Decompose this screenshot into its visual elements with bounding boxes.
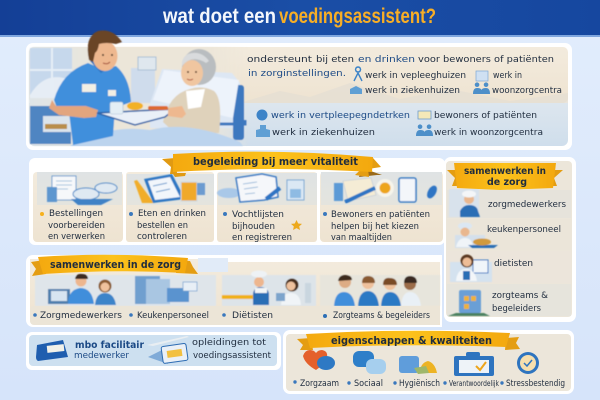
banner: samenwerken in de zorg: de zorg xyxy=(487,177,527,188)
work settings, lower list: bewoners of patiënten xyxy=(434,111,537,121)
card: eten en drinken: Eten en drinken xyxy=(138,209,206,219)
panel: hero introduction xyxy=(26,30,572,150)
row: keukenpersoneel xyxy=(447,219,571,250)
text: mbo facilitair medewerker: medewerker xyxy=(74,351,129,361)
hero illustration: care assistant serving a meal to a resident xyxy=(29,30,250,146)
labels: Zorgzaam xyxy=(300,379,339,389)
card: vochtlijsten: en registreren xyxy=(232,233,292,243)
icon: diploma cap xyxy=(147,336,189,364)
meal tray xyxy=(97,109,175,125)
work settings, upper list: werk in vepleeghuizen xyxy=(365,71,466,81)
icon: card xyxy=(418,111,431,119)
header bar with title xyxy=(0,0,600,37)
icon: person xyxy=(354,67,362,81)
work settings, lower list xyxy=(256,110,543,138)
card: eten en drinken: controleren xyxy=(137,232,187,242)
caption strip: Keukenpersoneel xyxy=(137,311,209,321)
card: maaltijden kiezen xyxy=(320,172,443,243)
work settings, upper list xyxy=(350,67,562,96)
card: bestellingen xyxy=(33,172,123,242)
row: dietisten xyxy=(447,251,571,283)
caption strip: Zorgteams & begeleiders xyxy=(333,311,430,321)
card: vochtlijsten: Vochtlijsten xyxy=(232,210,284,220)
text: mbo facilitair medewerker: mbo facilitair xyxy=(75,340,144,351)
illustration: zorgmedewerkers and keukenpersoneel xyxy=(35,274,216,306)
caption strip xyxy=(30,306,440,325)
card: eten en drinken xyxy=(126,172,214,242)
card: vochtlijsten xyxy=(217,172,317,243)
icon: hospital xyxy=(350,86,362,94)
banner: begeleiding bij meer vitaliteit: begeleiding bij meer vitaliteit xyxy=(193,155,358,168)
card: maaltijden kiezen: helpen bij het kiezen xyxy=(331,222,419,232)
work settings, lower list: werk in woonzorgcentra xyxy=(434,128,543,138)
panel: eigenschappen en kwaliteiten xyxy=(283,330,574,394)
title: voedingsassistent? xyxy=(279,5,436,28)
patient head xyxy=(182,49,216,85)
banner: samenwerken in de zorg xyxy=(447,163,563,190)
row: zorgmedewerkers: zorgmedewerkers xyxy=(488,200,566,210)
banner: begeleiding bij meer vitaliteit xyxy=(162,152,382,177)
intro text xyxy=(247,55,554,79)
card: bestellingen: Bestellingen xyxy=(49,209,103,219)
labels: Sociaal xyxy=(354,379,383,389)
banner: samenwerken in de zorg: samenwerken in xyxy=(464,166,546,177)
card: bestellingen: voorbereiden xyxy=(48,221,105,231)
care assistant body xyxy=(54,63,131,145)
intro text: ondersteunt xyxy=(247,55,313,65)
banner: samenwerken in de zorg xyxy=(31,255,198,276)
text: opleidingen tot voedingsassistent xyxy=(192,338,271,361)
panel: begeleiding bij meer vitaliteit xyxy=(29,152,445,245)
card: bestellingen: en verwerken xyxy=(48,232,105,242)
text: mbo facilitair medewerker xyxy=(74,340,144,361)
icon: hospital building xyxy=(256,125,270,137)
work settings, lower list: werk in ziekenhuizen xyxy=(272,128,375,138)
labels: Hygiënisch xyxy=(399,379,440,389)
pillow xyxy=(153,70,239,118)
icon: heart xyxy=(303,350,335,370)
intro text: in zorginstellingen. xyxy=(248,69,346,79)
banner: eigenschappen en kwaliteiten xyxy=(297,331,520,350)
patient body xyxy=(163,87,220,135)
row: keukenpersoneel: keukenpersoneel xyxy=(487,225,561,235)
icon: hygiene supplies xyxy=(399,356,437,374)
text: opleidingen tot voedingsassistent: opleidingen tot xyxy=(192,338,267,348)
card: vochtlijsten: bijhouden xyxy=(232,222,275,232)
side cart xyxy=(30,106,71,144)
title: wat doet een xyxy=(162,5,276,28)
intro text: en drinken xyxy=(358,55,415,65)
icon: two people xyxy=(416,124,433,136)
labels xyxy=(293,379,565,389)
care assistant head and hair xyxy=(92,41,118,71)
illustration: zorgteams xyxy=(320,275,440,306)
caption strip: Zorgmedewerkers xyxy=(40,311,122,321)
card: eten en drinken: bestellen en xyxy=(137,221,188,231)
icon: blue book xyxy=(36,340,68,361)
panel: samenwerken in de zorg (wide) xyxy=(26,255,442,327)
text: opleidingen tot voedingsassistent: voedingsassistent xyxy=(193,351,271,361)
row: dietisten: dietisten xyxy=(494,259,533,269)
icon: star xyxy=(291,220,302,230)
intro text: voor bewoners of patiënten xyxy=(418,55,554,65)
panel: opleidingen xyxy=(26,332,281,370)
icon: stopwatch xyxy=(517,352,539,374)
labels: Verantwoordelijk xyxy=(449,379,500,388)
work settings, upper list: werk in xyxy=(493,71,522,81)
work settings, upper list: werk in ziekenhuizen xyxy=(365,86,460,96)
icon: speech bubble xyxy=(256,110,268,120)
icon: clipboard with check xyxy=(454,352,494,376)
caption strip: Diëtisten xyxy=(232,311,273,321)
row: zorgteams en begeleiders xyxy=(447,284,571,316)
illustration: dietisten xyxy=(222,270,316,306)
icon: speech bubbles xyxy=(353,351,386,374)
row: zorgmedewerkers xyxy=(447,189,571,218)
icon: two people xyxy=(473,82,490,94)
card: maaltijden kiezen: Bewoners en patiënten xyxy=(331,210,430,220)
labels: Stressbestendig xyxy=(506,379,565,389)
intro text: bij eten xyxy=(316,55,354,65)
banner: samenwerken in de zorg: samenwerken in de zorg xyxy=(50,259,181,271)
work settings, lower list: werk in vertpleepegndetrken xyxy=(271,111,410,121)
row: zorgteams en begeleiders: begeleiders xyxy=(492,304,541,314)
work settings, upper list: woonzorgcentra xyxy=(492,86,562,96)
banner: eigenschappen en kwaliteiten: eigenschappen & kwaliteiten xyxy=(331,335,492,347)
row: zorgteams en begeleiders: zorgteams & xyxy=(492,291,548,301)
card: maaltijden kiezen: van maaltijden xyxy=(331,233,392,243)
panel: samenwerken in de zorg (right column) xyxy=(444,157,576,322)
icon: building grid xyxy=(476,71,488,81)
blanket xyxy=(70,127,243,146)
